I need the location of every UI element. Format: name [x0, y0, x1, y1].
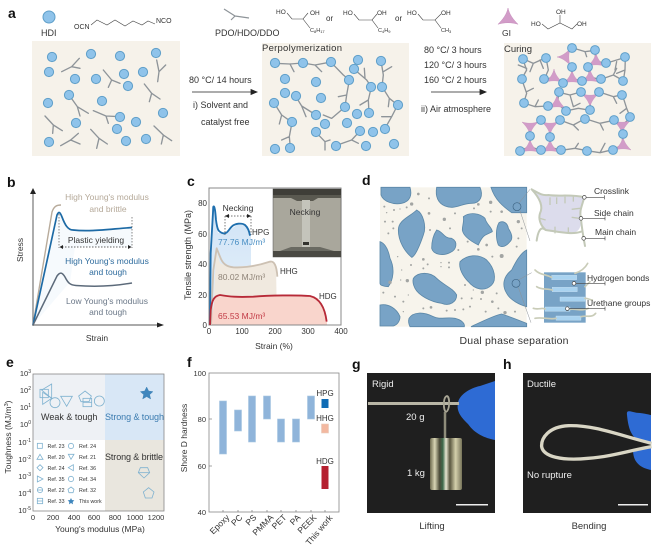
panel c: tensile curves — [183, 173, 348, 351]
y ticks: 40 — [198, 508, 206, 517]
x ticks — [207, 327, 348, 336]
y ticks: 10 — [18, 438, 27, 447]
y ticks: 10 — [18, 472, 27, 481]
panel e: Ashby plot — [3, 354, 164, 534]
legend: Ref. 22 — [48, 488, 65, 494]
step 1 conditions: catalyst free — [201, 117, 250, 127]
y ticks: 1 — [28, 403, 31, 409]
step 1 conditions: 80 °C/ 14 hours — [189, 75, 252, 85]
legend: Ref. 34 — [79, 477, 96, 483]
HDO structure: HO — [343, 10, 353, 17]
x ticks: 400 — [68, 513, 80, 522]
HDO structure — [343, 10, 391, 34]
y ticks: -1 — [27, 438, 31, 444]
weight — [430, 438, 462, 490]
arrow: step 2 — [431, 90, 486, 94]
y ticks: 2 — [28, 386, 31, 392]
quadrant: weak and tough — [33, 374, 105, 440]
category labels: PA — [288, 512, 303, 527]
x ticks — [31, 513, 164, 522]
photo background — [367, 373, 495, 513]
category labels — [208, 512, 335, 547]
series labels: HDG — [319, 292, 337, 301]
caption: Dual phase separation — [460, 335, 569, 347]
box: prepolymer — [262, 43, 409, 156]
y ticks: 40 — [198, 260, 208, 269]
x ticks: 600 — [88, 513, 100, 522]
y ticks: 10 — [20, 420, 28, 429]
label g: g — [352, 356, 361, 372]
text: high modulus tough: and tough — [89, 267, 127, 277]
legend: Ref. 24 — [48, 466, 65, 472]
panel a: synthesis scheme — [8, 5, 651, 156]
quadrant: strong and brittle — [105, 440, 164, 511]
axes — [33, 192, 159, 326]
step 1 conditions: i) Solvent and — [193, 100, 248, 110]
legend: Ref. 36 — [79, 466, 96, 472]
y ticks: 3 — [28, 369, 31, 375]
DDO structure — [407, 10, 452, 34]
category labels: PET — [270, 512, 288, 531]
hook — [444, 396, 449, 412]
leader lines — [565, 195, 605, 311]
quadrant labels — [41, 412, 164, 462]
PDO structure — [276, 9, 325, 34]
glycerol structure: OH — [577, 21, 587, 28]
label a: a — [8, 5, 16, 21]
energy labels: 80.02 MJ/m³ — [218, 272, 265, 282]
energy labels — [218, 237, 265, 321]
y ticks: 60 — [198, 230, 208, 239]
glycerol structure: OH — [556, 9, 566, 16]
glycerol structure — [531, 9, 587, 29]
category labels: PMMA — [250, 512, 276, 537]
category labels: Epoxy — [208, 512, 232, 536]
quadrant labels: Strong & tough — [105, 412, 164, 422]
text: No rupture: No rupture — [527, 470, 572, 481]
markers — [40, 384, 154, 498]
y ticks: 10 — [20, 369, 28, 378]
y axis title: Tensile strength (MPa) — [183, 210, 193, 300]
y axis title: 3 — [4, 403, 10, 406]
HDO structure: OH — [377, 10, 387, 17]
bar: HDG — [322, 466, 328, 489]
y ticks: 80 — [198, 415, 206, 424]
text: 1 kg: 1 kg — [407, 468, 425, 479]
PDO structure: 8 — [314, 29, 317, 34]
bars: reference polymers — [220, 396, 314, 454]
panel f: Shore D hardness — [179, 354, 339, 547]
energy labels: 65.53 MJ/m³ — [218, 311, 265, 321]
x ticks: 0 — [31, 513, 35, 522]
y axis title: Shore D hardness — [179, 404, 189, 472]
HDO structure: 4 — [382, 29, 385, 34]
icon: GI tri-star — [498, 8, 518, 24]
y ticks: 0 — [203, 321, 208, 330]
PDO structure: C — [310, 28, 314, 34]
curve glow — [33, 212, 132, 325]
caption: Bending — [572, 521, 606, 532]
y ticks: 10 — [18, 489, 27, 498]
y ticks: 20 — [198, 291, 208, 300]
text: brittle: and brittle — [89, 204, 127, 214]
series labels: HDG — [316, 457, 334, 466]
rigid bar — [368, 402, 459, 405]
step 2 conditions — [421, 45, 491, 114]
label h: h — [503, 356, 512, 372]
quadrant labels: Strong & brittle — [105, 452, 163, 462]
necking bracket — [223, 203, 254, 235]
y ticks: 60 — [198, 462, 206, 471]
bar: HHG — [322, 424, 328, 433]
heading: Perpolymerization: Perpolymerization — [262, 43, 342, 54]
arrowheads — [30, 188, 164, 328]
y ticks: 10 — [18, 506, 27, 515]
frame — [33, 374, 164, 511]
panel h: bending photo — [503, 356, 652, 532]
legend: Ref. 20 — [48, 455, 65, 461]
area fills — [210, 207, 327, 325]
chains: monomers, prepolymer — [45, 48, 630, 153]
or: or — [395, 14, 402, 23]
callout labels: Crosslink — [594, 186, 630, 196]
y ticks: 0 — [28, 420, 31, 426]
text: Ductile: Ductile — [527, 379, 556, 390]
text: low modulus tough: Low Young's modulus — [66, 296, 148, 306]
HDI structure: OCN — [74, 24, 90, 31]
y axis title: Toughness (MJ/m — [3, 406, 13, 474]
y ticks: 10 — [20, 386, 28, 395]
legend: Ref. 32 — [79, 488, 96, 494]
y ticks: -5 — [27, 506, 31, 512]
series labels — [316, 389, 334, 466]
y ticks: 10 — [20, 403, 28, 412]
PDO/HDO/DDO label: PDO/HDO/DDO — [215, 28, 280, 38]
DDO structure: HO — [407, 10, 417, 17]
panel g: lifting photo — [352, 356, 495, 532]
legend: Ref. 33 — [48, 499, 65, 505]
curve: low modulus and tough — [33, 273, 132, 325]
x ticks: 200 — [47, 513, 59, 522]
bent sample — [542, 426, 652, 459]
series labels — [252, 228, 337, 301]
glycerol structure: HO — [531, 21, 541, 28]
text: Rigid: Rigid — [372, 379, 394, 390]
hook stem — [444, 412, 446, 440]
y axis title: Stress — [15, 238, 25, 262]
DDO structure: 3 — [449, 29, 452, 34]
x ticks: 100 — [235, 327, 249, 336]
panel b: stress-strain schematic — [7, 174, 164, 343]
inset: hard phase detail — [533, 263, 596, 323]
step 1 conditions — [189, 75, 252, 127]
heading: Curing: Curing — [504, 44, 532, 55]
energy labels: 77.76 MJ/m³ — [218, 237, 265, 247]
box: cured network — [504, 43, 651, 156]
inset: soft phase detail — [532, 189, 585, 246]
icon: HDI bead — [43, 11, 55, 23]
step 2 conditions: 80 °C/ 3 hours — [424, 45, 482, 55]
HDO structure: C — [378, 28, 382, 34]
legend: This work — [79, 499, 102, 505]
scale bar — [618, 504, 648, 506]
quadrant: strong and tough — [105, 374, 164, 440]
series labels: HHG — [316, 414, 334, 423]
text: low modulus tough: and tough — [89, 307, 127, 317]
PDO structure: H — [316, 28, 320, 34]
photo background — [523, 373, 651, 513]
step 2 conditions: 120 °C/ 3 hours — [424, 60, 487, 70]
legend: Ref. 21 — [79, 455, 96, 461]
box: monomers — [32, 41, 180, 156]
x ticks: 1000 — [127, 513, 143, 522]
category labels: PC — [229, 512, 244, 528]
y ticks: -2 — [27, 455, 31, 461]
beads: cured network — [516, 44, 634, 155]
label c: c — [187, 173, 195, 189]
label d: d — [362, 172, 371, 188]
curve: HDG — [210, 295, 327, 325]
HDO structure: 9 — [388, 29, 391, 34]
y ticks: -4 — [27, 489, 31, 495]
y ticks — [198, 199, 208, 330]
x ticks: 400 — [334, 327, 348, 336]
or: or — [326, 14, 333, 23]
text: 20 g: 20 g — [406, 412, 424, 423]
GI label: GI — [502, 28, 511, 38]
x ticks: 800 — [109, 513, 121, 522]
curve: brittle — [33, 205, 61, 325]
necking bracket: Necking — [223, 203, 254, 213]
plastic yielding marker — [59, 214, 132, 249]
label b: b — [7, 174, 16, 190]
HDI label: HDI — [41, 28, 56, 38]
beads: monomers — [43, 48, 168, 147]
text: brittle: High Young's modulus — [65, 192, 149, 202]
category labels: This work — [303, 512, 335, 547]
PDO structure: HO — [276, 9, 286, 16]
scale bar — [456, 504, 488, 506]
legend: Ref. 23 — [48, 444, 65, 450]
label e: e — [6, 354, 14, 370]
curve: HPG — [210, 206, 250, 325]
x ticks: 1200 — [148, 513, 164, 522]
y ticks — [18, 369, 31, 515]
PDO structure: OH — [310, 10, 320, 17]
curve: HHG — [211, 248, 277, 325]
legend — [37, 443, 102, 505]
bar: HPG — [322, 399, 328, 408]
callout labels — [587, 186, 650, 308]
legend: Ref. 24 — [79, 444, 96, 450]
beads: prepolymer — [269, 55, 403, 154]
inset: necking photo — [273, 189, 341, 257]
caption: Lifting — [419, 521, 445, 532]
y ticks: 10 — [18, 455, 27, 464]
callout labels: Urethane groups — [587, 298, 650, 308]
x axis title: Young's modulus (MPa) — [55, 524, 145, 534]
glove — [458, 381, 495, 440]
x axis title: Strain (%) — [255, 341, 293, 351]
HDI structure — [74, 18, 172, 31]
morphology map — [380, 187, 532, 327]
series labels: HPG — [252, 228, 269, 237]
category labels: PS — [243, 512, 259, 527]
inset: necking photo: Necking — [290, 207, 321, 217]
panel d: dual phase separation — [362, 172, 650, 347]
x axis title: Strain — [86, 333, 108, 343]
y axis title: ) — [3, 400, 13, 403]
y ticks: -3 — [27, 472, 31, 478]
x ticks: 0 — [207, 327, 212, 336]
glove — [627, 411, 651, 470]
plastic yielding marker: Plastic yielding — [68, 235, 124, 245]
HDO structure: H — [384, 28, 388, 34]
label f: f — [187, 354, 192, 370]
text: high modulus tough: High Young's modulus — [65, 256, 149, 266]
series labels: HPG — [316, 389, 334, 398]
arrow: step 1 — [192, 90, 257, 94]
curves — [210, 206, 327, 325]
x ticks: 300 — [301, 327, 315, 336]
frame and ticks — [209, 373, 339, 512]
DDO structure: CH — [441, 28, 449, 34]
callout labels: Main chain — [595, 227, 636, 237]
step 2 conditions: ii) Air atmosphere — [421, 104, 491, 114]
y ticks: 100 — [193, 369, 206, 378]
icon: diol chain — [224, 9, 249, 20]
step 2 conditions: 160 °C/ 2 hours — [424, 75, 487, 85]
DDO structure: OH — [441, 10, 451, 17]
PDO structure: 17 — [320, 29, 325, 34]
y ticks — [193, 369, 206, 517]
tri-stars: cured network — [522, 49, 631, 152]
x ticks: 200 — [268, 327, 282, 336]
category labels: PEEK — [295, 512, 319, 535]
HDI structure: NCO — [156, 18, 172, 25]
legend: Ref. 35 — [48, 477, 65, 483]
series labels: HHG — [280, 267, 298, 276]
callout labels: Side chain — [594, 208, 634, 218]
y ticks: 80 — [198, 199, 208, 208]
quadrant labels: Weak & tough — [41, 412, 97, 422]
curve: high modulus and tough — [33, 213, 132, 325]
callout labels: Hydrogen bonds — [587, 273, 649, 283]
plot frame — [209, 188, 341, 325]
